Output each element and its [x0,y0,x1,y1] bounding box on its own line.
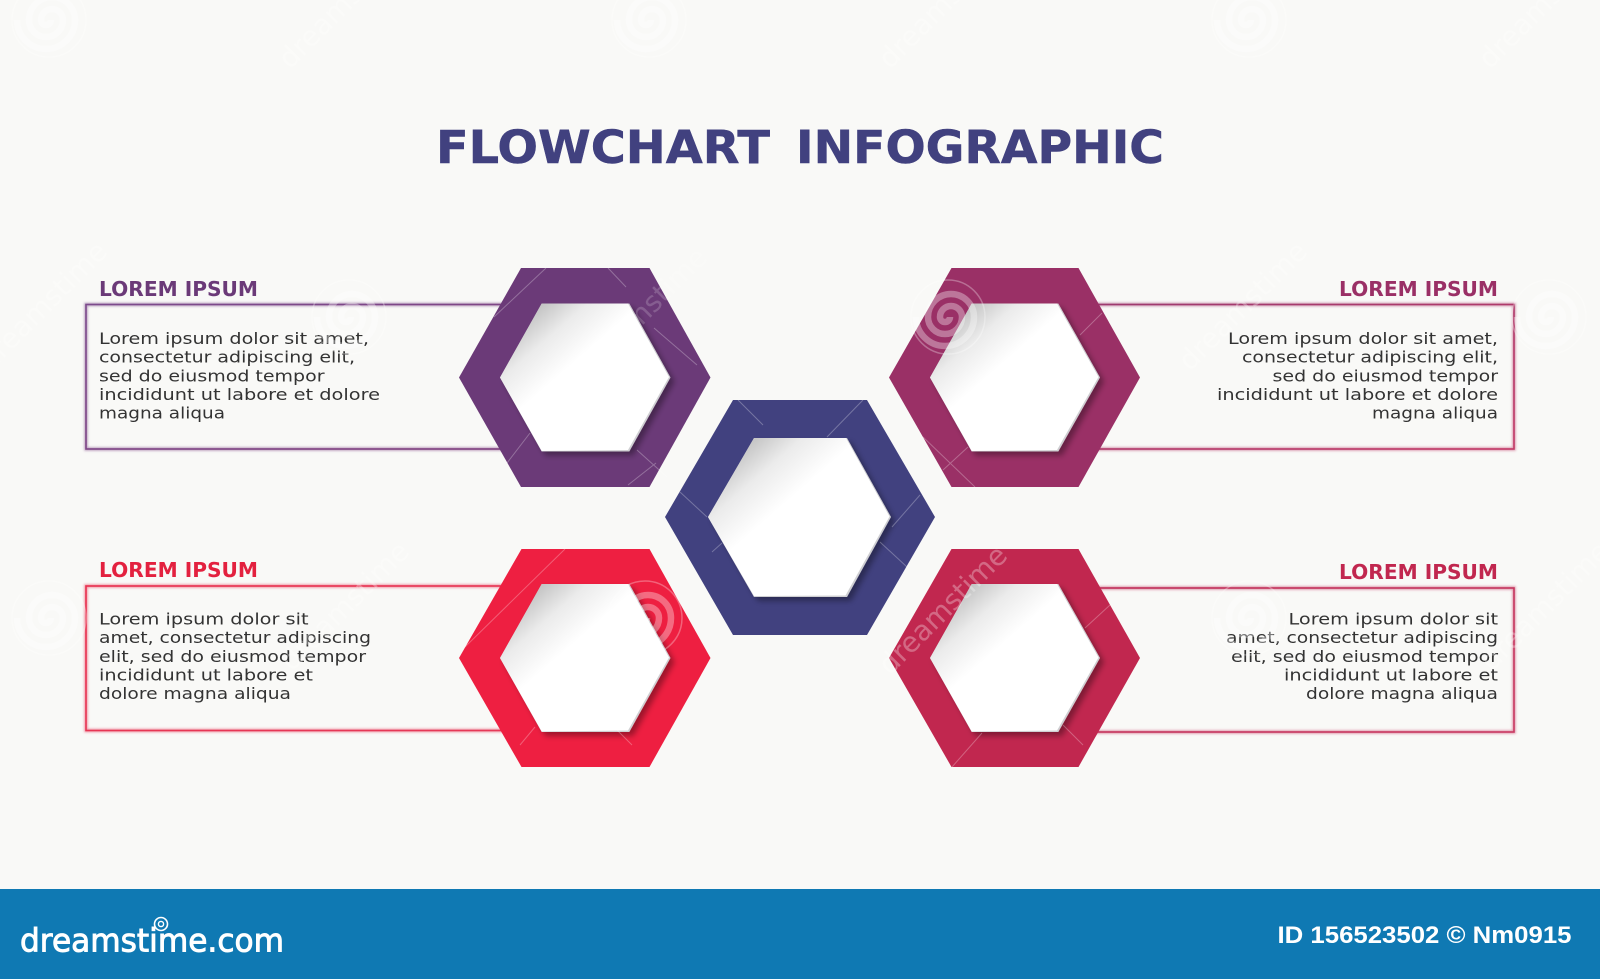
body text: amet, consectetur adipiscing [99,628,371,647]
hexagon: red [459,549,710,767]
body text: magna aliqua [1372,404,1498,423]
body text: incididunt ut labore et dolore [1217,385,1498,404]
body text: amet, consectetur adipiscing [1226,628,1498,647]
body text: incididunt ut labore et [1284,666,1498,684]
footer band [0,889,1600,979]
hexagon: purple [459,268,710,487]
body text: consectetur adipiscing elit, [1242,348,1498,367]
body text: dolore magna aliqua [99,684,291,703]
body text [1226,610,1498,703]
panel: bottom right [889,549,1514,767]
heading: LOREM IPSUM [1339,277,1498,301]
heading: LOREM IPSUM [1339,560,1498,584]
body text [99,329,380,423]
footer image id: ID 156523502 © Nm0915 [1278,922,1572,949]
panel: bottom left [86,549,710,767]
body text: incididunt ut labore et [99,666,313,684]
body text: dolore magna aliqua [1306,684,1498,703]
hexagon: center navy [665,400,935,635]
body text [99,610,371,703]
panel: top left [86,268,710,487]
body text: incididunt ut labore et dolore [99,385,380,404]
body text: magna aliqua [99,404,225,423]
watermark: spirals and diagonal marks: dreamstime [872,539,1014,681]
hexagon: plum [889,268,1140,487]
body text: sed do eiusmod tempor [99,366,325,385]
body text: Lorem ipsum dolor sit amet, [99,329,369,348]
footer logo: dreamstime.com [20,922,284,960]
body text: elit, sed do eiusmod tempor [1231,647,1498,666]
watermark: spirals and diagonal marks: dreamstime [572,241,714,383]
hexagon: crimson [889,549,1140,767]
heading: LOREM IPSUM [99,277,258,301]
title: INFOGRAPHIC [796,121,1164,174]
text box frame [86,304,546,449]
watermark: spirals and diagonal marks [0,0,1600,767]
title: FLOWCHART [436,121,770,174]
watermark: spirals and diagonal marks: dreamstime [1172,235,1314,377]
title [436,121,1164,174]
heading: LOREM IPSUM [99,558,258,582]
body text: Lorem ipsum dolor sit [1288,610,1498,628]
body text: consectetur adipiscing elit, [99,348,355,367]
body text: elit, sed do eiusmod tempor [99,647,366,666]
panel: top right [889,268,1514,487]
text box frame [86,586,546,730]
text box frame [1054,588,1514,732]
body text: Lorem ipsum dolor sit [99,610,308,628]
body text [1217,329,1499,423]
text box frame [1054,304,1514,449]
body text: sed do eiusmod tempor [1272,366,1499,385]
watermark: spirals and diagonal marks: dreamstime [274,535,416,677]
body text: Lorem ipsum dolor sit amet, [1228,329,1498,348]
